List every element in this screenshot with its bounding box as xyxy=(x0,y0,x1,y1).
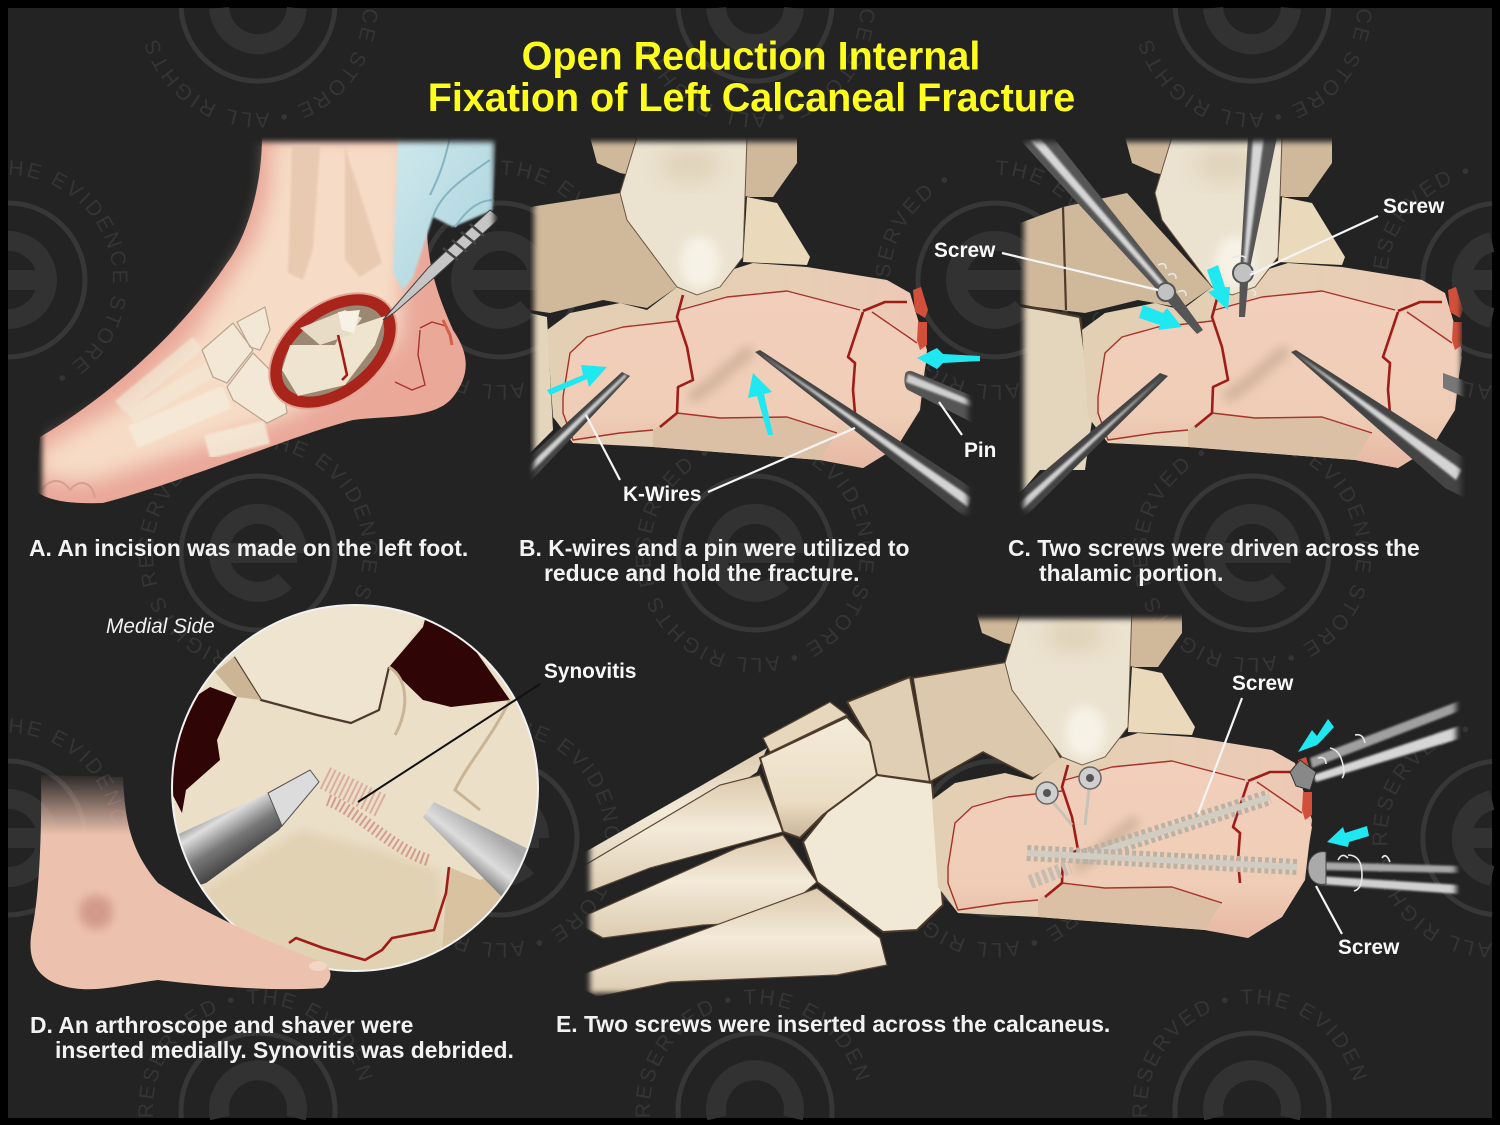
arthroscope xyxy=(423,802,530,900)
metatarsal 4 xyxy=(580,775,783,895)
panel E: foot skeleton with screws xyxy=(580,607,1462,997)
right driver xyxy=(1239,137,1277,317)
watermark: THE EVIDENCE STORE • ALL RIGHTS RESERVED • xyxy=(924,919,1078,958)
upper driver xyxy=(1290,700,1462,790)
left driver xyxy=(1020,137,1203,334)
tarsal bones xyxy=(530,193,677,313)
watermark: THE EVIDENCE STORE • ALL RIGHTS RESERVED • xyxy=(636,451,874,672)
watermark: THE EVIDENCE STORE • ALL RIGHTS RESERVED • xyxy=(454,722,620,958)
title: Fixation of Left Calcaneal Fracture xyxy=(428,76,1075,120)
synovitis xyxy=(325,778,382,806)
lower tan xyxy=(203,830,444,970)
panel B: K-wires and pin xyxy=(524,137,975,520)
lower fracture line xyxy=(289,867,449,960)
toes xyxy=(42,481,95,498)
captions top: A. An incision was made on the left foot. xyxy=(29,535,468,561)
watermark: THE EVIDENCE STORE • ALL RIGHTS RESERVED • xyxy=(457,160,580,400)
labels: Screw (panel C) xyxy=(934,195,1445,290)
labels: Screw (panel E): Screw xyxy=(1232,672,1294,695)
pin xyxy=(904,371,975,424)
shaver xyxy=(179,794,282,885)
tarsal bones xyxy=(1020,193,1212,313)
talar neck xyxy=(913,662,1063,782)
title: Open Reduction Internal xyxy=(522,34,980,78)
watermark: CE STORE • ALL RIGHTS xyxy=(146,10,378,128)
labels: Screw (panel C): Screw xyxy=(1383,195,1445,218)
thalamic screw heads xyxy=(1036,767,1101,825)
watermark: CE STORE • ALL RIGHTS xyxy=(642,10,874,128)
long screw: lower xyxy=(1027,853,1297,882)
captions top: B. K-wires and a pin were utilized to xyxy=(519,535,909,561)
arrow: right xyxy=(917,348,980,369)
calcaneus and talus xyxy=(932,607,1313,938)
metatarsal 2 xyxy=(580,888,887,997)
arrow: upper xyxy=(1207,265,1230,310)
labels: K-Wires and Pin: K-Wires xyxy=(623,483,701,506)
watermark: RESERVED • THE EVIDEN xyxy=(1132,990,1367,1116)
upper tarsal xyxy=(847,677,930,782)
watermark: ALL RIGHTS RESERVED • xyxy=(1373,168,1492,400)
panel A: foot with incision xyxy=(35,137,500,503)
right K-wire xyxy=(755,350,975,520)
bone base xyxy=(170,600,540,975)
panel D: arthroscopic view xyxy=(165,590,540,980)
scalpel xyxy=(383,210,500,320)
label: Synovitis xyxy=(358,660,636,802)
lower driver xyxy=(1308,852,1460,894)
captions bottom: E. Two screws were inserted across the calcaneus. xyxy=(556,1011,1110,1037)
foot ankle bump xyxy=(79,895,113,929)
arrow: lower left xyxy=(1139,305,1182,330)
cuneiform xyxy=(760,717,877,838)
calcaneus and talus xyxy=(1082,137,1463,468)
watermark: THE EVIDENCE STORE • ALL RIGHTS RESERVED • xyxy=(138,440,378,666)
watermark: RESERVED • THE EVIDEN xyxy=(138,990,373,1116)
skin highlight xyxy=(40,137,410,482)
watermark: HE EVIDENCE STORE • xyxy=(10,160,128,381)
maroon cavities xyxy=(389,620,510,707)
labels: K-Wires and Pin: Pin xyxy=(964,439,996,462)
incision xyxy=(268,292,398,410)
talus xyxy=(389,664,391,667)
left K-wire xyxy=(532,372,630,479)
labels: Screw (panel E): Screw xyxy=(1338,936,1400,959)
exposed bones xyxy=(282,316,385,396)
arrow: E upper xyxy=(1298,719,1334,752)
captions bottom: D. An arthroscope and shaver were xyxy=(30,1012,413,1038)
lower left K-wire xyxy=(1014,373,1168,520)
cuboid xyxy=(803,775,943,932)
screw collars xyxy=(1157,283,1175,301)
metatarsal 3 xyxy=(580,835,817,938)
toenail xyxy=(309,961,327,971)
watermark: THE EVIDENCE STORE • ALL RIGHTS RESERVED • xyxy=(876,160,1099,400)
labels: K-Wires and Pin xyxy=(586,402,996,506)
arrow: middle xyxy=(748,373,773,435)
label: Medial Side: Medial Side xyxy=(106,615,215,638)
long screw: upper xyxy=(1083,797,1270,857)
captions top: reduce and hold the fracture. xyxy=(544,560,859,586)
label: Synovitis: Synovitis xyxy=(544,660,636,683)
circle ring xyxy=(171,604,539,972)
neck bone xyxy=(389,667,510,810)
top small tarsal xyxy=(763,702,847,752)
captions top: C. Two screws were driven across the xyxy=(1008,535,1420,561)
panel D: medial foot xyxy=(30,775,331,989)
arrow: E lower xyxy=(1327,826,1369,847)
heel fracture lines xyxy=(395,322,446,390)
captions top: thalamic portion. xyxy=(1039,560,1223,586)
watermark: HE EVIDENCE STORE • xyxy=(10,718,122,806)
labels: Screw (panel C): Screw xyxy=(934,239,996,262)
right K-wire xyxy=(1291,350,1465,498)
gloved hand xyxy=(393,137,497,290)
metatarsals xyxy=(120,343,210,417)
leg bones xyxy=(288,147,382,280)
tarsal bones xyxy=(202,307,287,423)
rotation marks xyxy=(1158,256,1257,296)
watermark: ALL RIGHTS RESERVED • xyxy=(1372,726,1492,958)
captions bottom xyxy=(30,1011,1110,1063)
labels: Screw (panel E) xyxy=(1198,672,1400,959)
metatarsal 5 xyxy=(580,748,767,890)
captions top xyxy=(29,535,1420,586)
watermark: RESERVED • THE EVIDEN xyxy=(636,990,870,1116)
captions bottom: inserted medially. Synovitis was debrided. xyxy=(55,1037,514,1063)
calcaneus and talus xyxy=(547,137,928,468)
right side bone xyxy=(442,864,520,948)
panel C: screws across thalamic portion xyxy=(1014,137,1468,520)
arrow: left xyxy=(547,365,607,395)
pin stub xyxy=(1443,373,1464,397)
watermark: THE EVIDENCE STORE • ALL RIGHTS RESERVED • xyxy=(1132,450,1372,672)
watermark: CE STORE • ALL RIGHTS xyxy=(1140,10,1372,128)
foot skin xyxy=(35,137,466,503)
title xyxy=(428,34,1075,120)
